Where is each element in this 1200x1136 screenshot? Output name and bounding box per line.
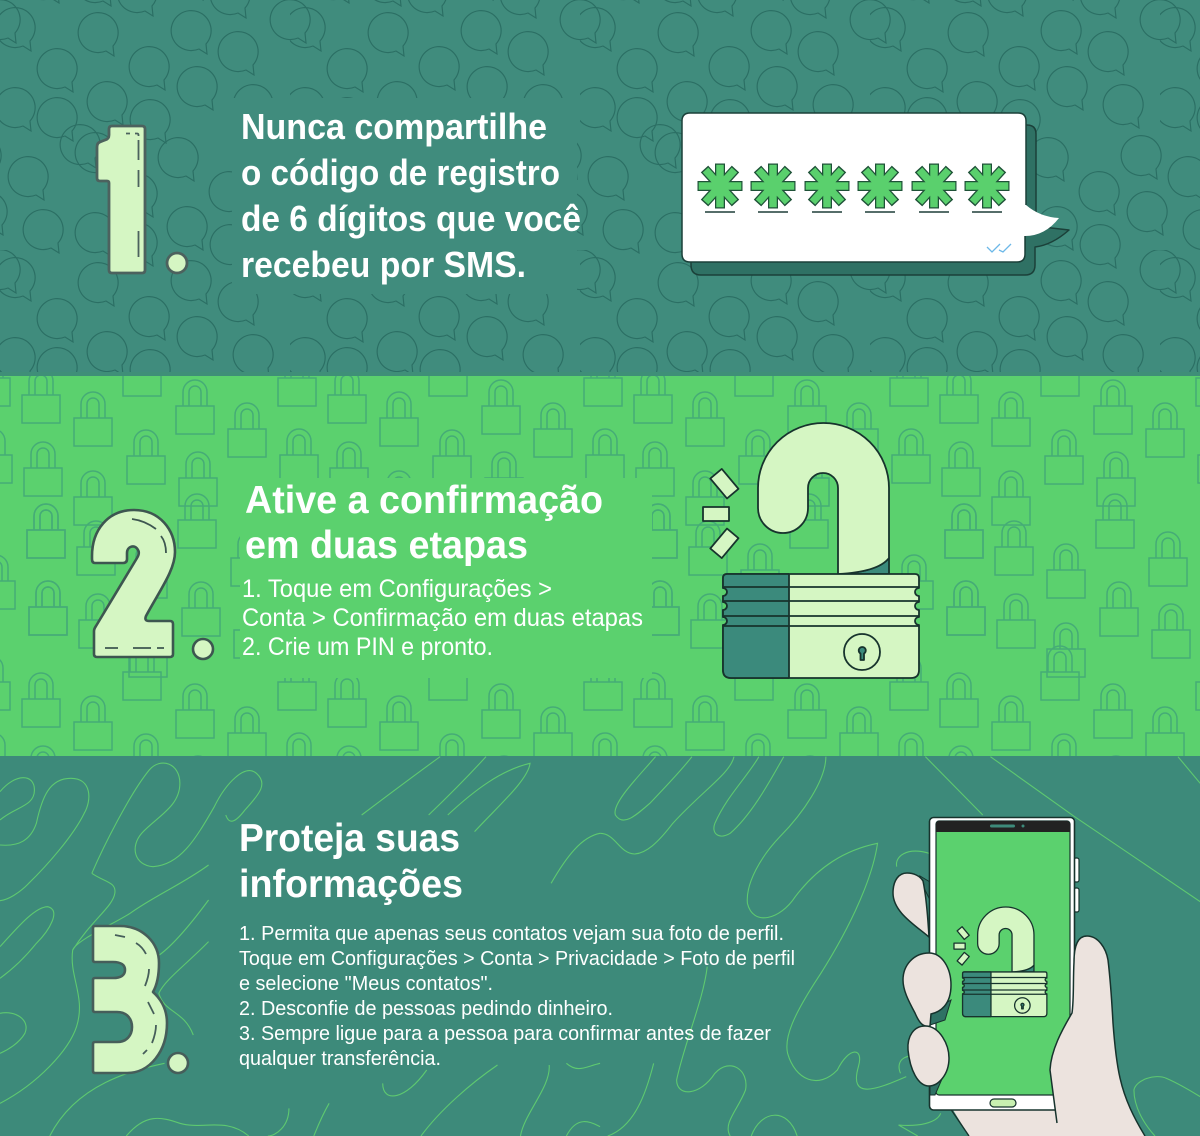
instructions step 3: 1. Permita que apenas seus contatos vejam sua foto de perfil. [239,922,784,945]
illustration: hand holding phone [893,818,1145,1136]
instructions step 3: qualquer transferência. [239,1047,441,1070]
message bubble with hidden code [682,113,1069,275]
heading: never share the code: Nunca compartilhe [241,106,547,147]
instructions step 3: 2. Desconfie de pessoas pedindo dinheiro. [239,997,613,1020]
numeral 3 [93,926,188,1073]
heading: never share the code: o código de registro [241,152,560,193]
instructions step 3 [239,922,795,1070]
numeral 1 [97,126,187,273]
heading: protect your information [239,817,463,906]
palm [950,1105,1060,1136]
heading: never share the code: de 6 dígitos que você [241,198,581,239]
finger shadows [930,1000,951,1095]
heading: never share the code: recebeu por SMS. [241,244,526,285]
smartphone [930,818,1079,1110]
instructions step 3: 3. Sempre ligue para a pessoa para confirmar antes de fazer [239,1022,771,1045]
heading: enable two-step verification [245,479,603,567]
panel: step 1 [0,0,1200,376]
instructions step 2: Conta > Confirmação em duas etapas [242,604,643,632]
panel: step 2 [0,372,1200,756]
heading: protect your information: informações [239,863,463,906]
heading: protect your information: Proteja suas [239,817,460,860]
instructions step 3: Toque em Configurações > Conta > Privacidade > Foto de perfil [239,947,795,970]
heading: enable two-step verification: Ative a confirmação [245,479,603,522]
instructions step 2: 2. Crie um PIN e pronto. [242,633,493,661]
panel: step 3 [0,756,1200,1136]
middle finger [903,953,951,1026]
heading: enable two-step verification: em duas etapas [245,524,528,567]
icon: open padlock [703,423,919,678]
upper finger [893,873,929,937]
upper finger shadow [920,876,930,900]
heading: never share the code [241,106,581,285]
numeral 2 [92,510,213,659]
instructions step 2: 1. Toque em Configurações > [242,575,552,603]
wavy line background [0,757,1200,1136]
instructions step 3: e selecione "Meus contatos". [239,972,493,995]
icon: padlock on screen [954,907,1047,1017]
thumb [1050,936,1145,1136]
instructions step 2 [242,575,643,661]
lower finger [908,1026,949,1086]
